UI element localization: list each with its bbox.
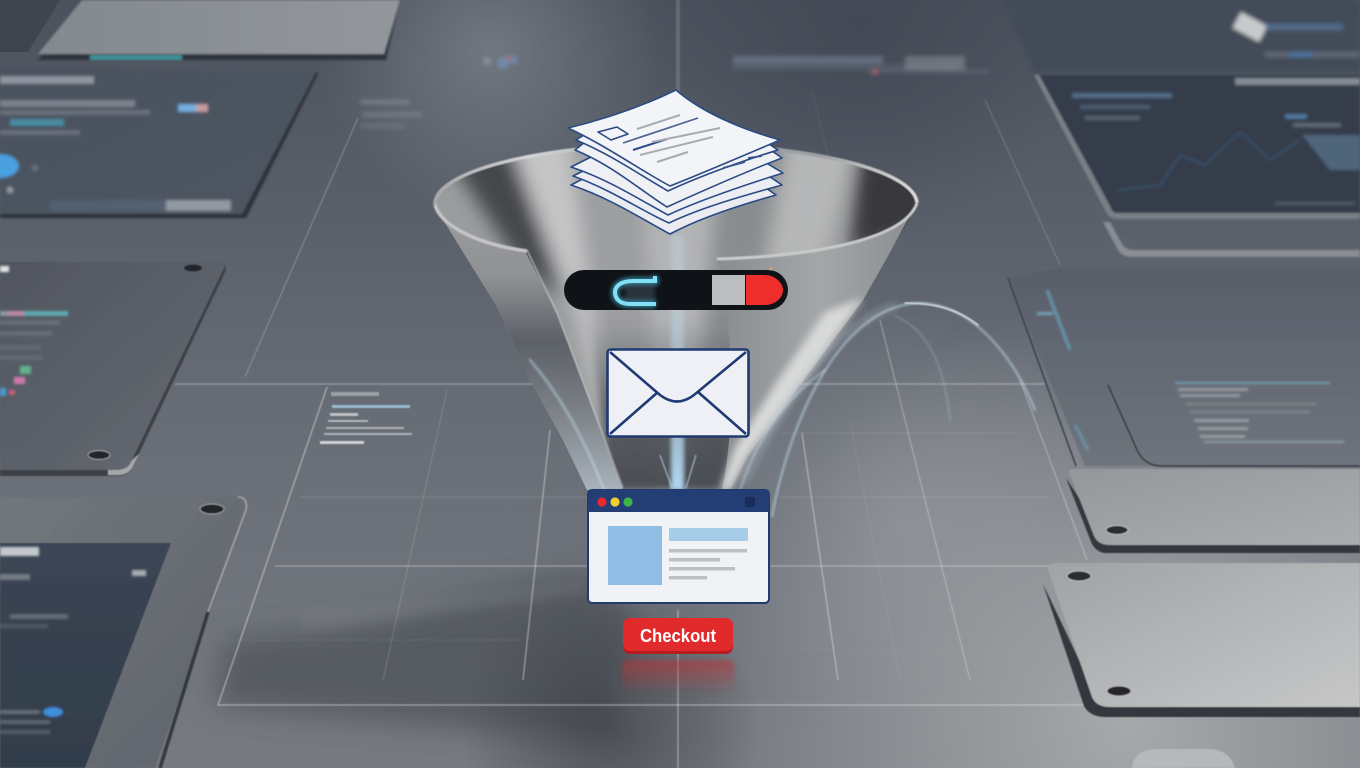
panel: top-right dark plate: [1003, 0, 1360, 72]
top sheet: [568, 90, 780, 186]
left seam: [527, 250, 623, 488]
icon: magnet capsule: [564, 268, 788, 310]
icon: envelope: [608, 350, 748, 436]
line chart: [1118, 132, 1300, 190]
blurred status bar, top centre: [483, 55, 990, 75]
rim front right: [717, 203, 917, 259]
floor shadow cast by the funnel: [215, 570, 640, 740]
interior wedges: [452, 160, 566, 300]
funnel metal surface: [435, 151, 916, 490]
panel: right rim plate: [1103, 222, 1360, 257]
blurred dashboard text: [0, 76, 231, 211]
mounting holes: [88, 264, 202, 460]
dark floor reflection: [0, 560, 800, 768]
bright band on right wall: [720, 298, 863, 490]
dark screen: [0, 543, 171, 768]
blurred text, upper centre left: [360, 100, 422, 128]
projected grid lines: [175, 0, 1087, 768]
blurred text block on grid, centre left: [320, 392, 412, 444]
rim front left: [435, 205, 527, 251]
panel: top-left light plate: [38, 0, 400, 60]
magnet U: [615, 276, 656, 304]
checkout button: [623, 618, 733, 654]
centre light beam: [671, 235, 684, 490]
icon: browser window: [588, 490, 769, 603]
text placeholder lines: [669, 549, 747, 580]
checkout button: Checkout: [640, 626, 716, 646]
sheet checkbox: [598, 127, 628, 140]
floor light streak: [300, 580, 585, 632]
blue energy arcs: [530, 303, 1035, 516]
panel: left dark dashboard plate: [0, 68, 318, 218]
funnel left wall: [435, 207, 623, 490]
panel: right bottom light plate: [1043, 563, 1360, 717]
sheet text lines: [623, 115, 762, 168]
icon: stack of documents: [568, 90, 783, 234]
checkout reflection: [622, 660, 734, 694]
panel: bottom-left plate with screen: [0, 497, 246, 768]
left chart bars: [0, 266, 68, 396]
lower beam splay: [660, 455, 696, 488]
window buttons: [597, 497, 633, 507]
panel: right lower light plate: [1066, 469, 1360, 553]
panel: right middle plate with code: [1008, 268, 1360, 466]
image placeholder: [608, 526, 662, 585]
panel: left charcoal plate: [0, 262, 226, 476]
funnel right wall: [717, 203, 917, 490]
lower darkening: [592, 329, 730, 489]
panel: bottom small plate: [1132, 749, 1235, 768]
rim back arc: [435, 144, 917, 205]
mounting hole: [200, 504, 224, 514]
funnel: [430, 130, 935, 500]
panel: right dark screen plate: [1034, 75, 1360, 219]
